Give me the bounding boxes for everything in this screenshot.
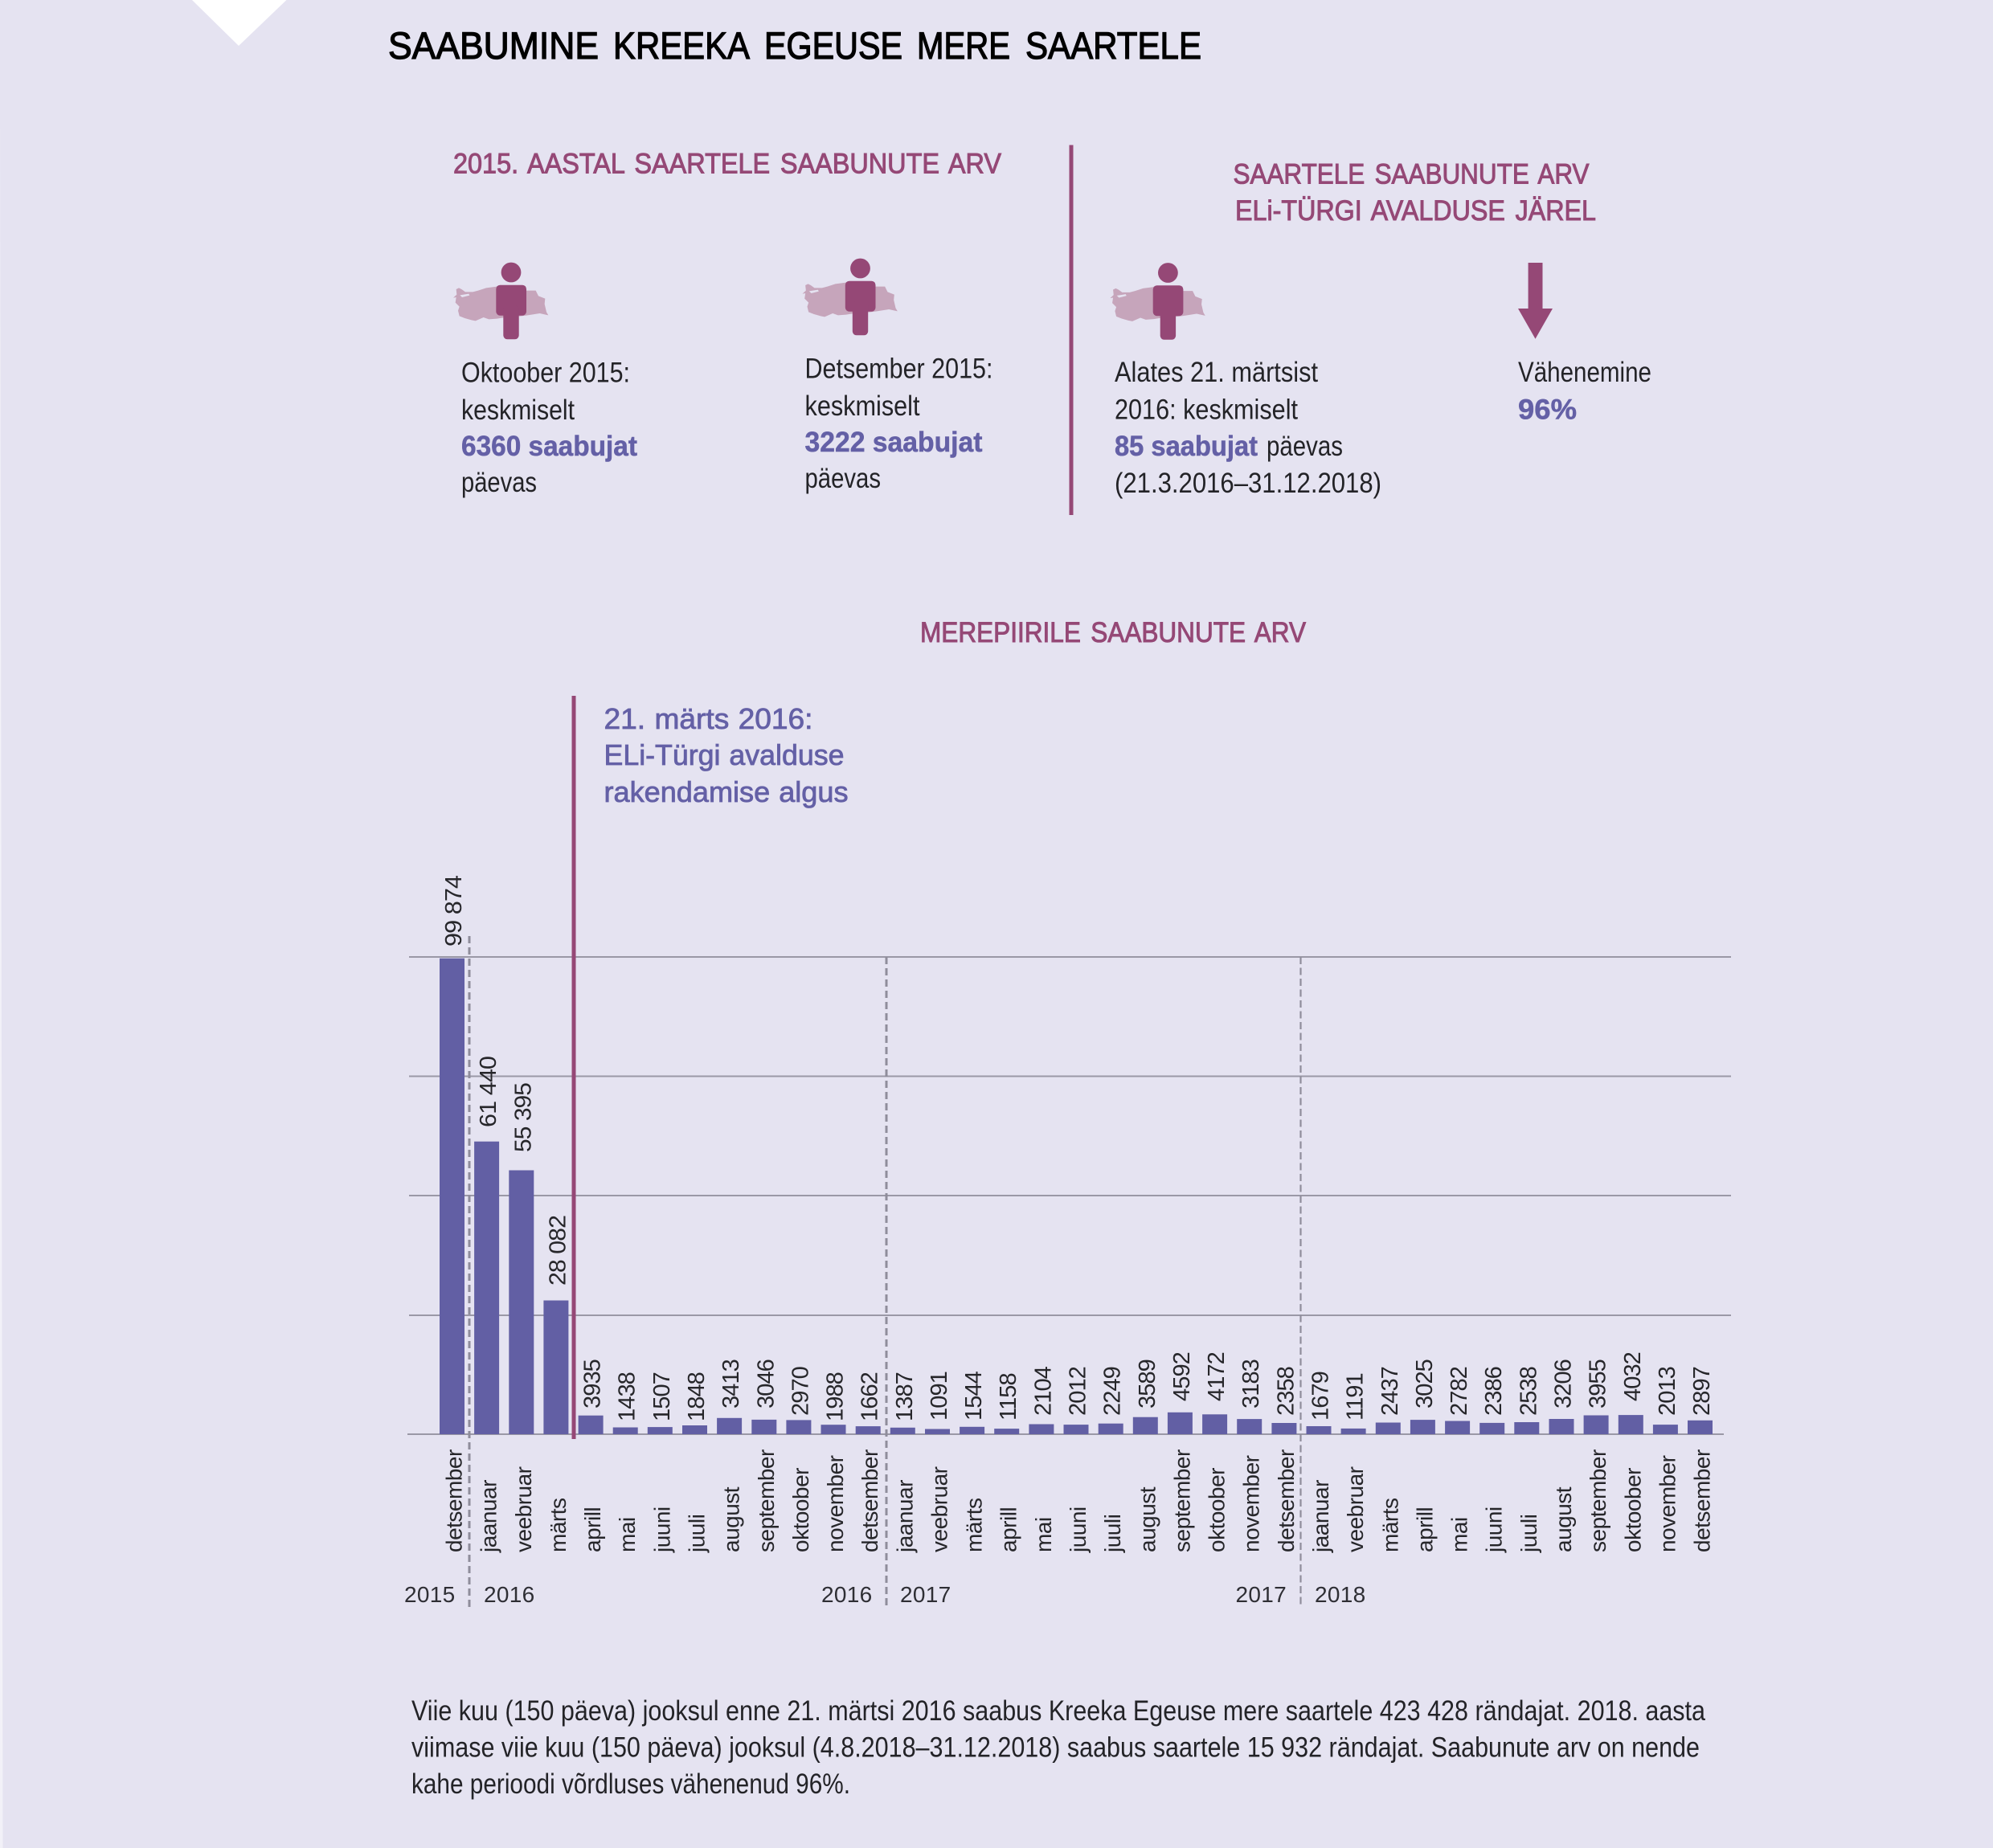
value labels: 2437 <box>1377 1367 1403 1416</box>
value labels: 2104 <box>1030 1366 1056 1416</box>
footnote paragraph: Viie kuu (150 päeva) jooksul enne 21. märtsi 2016 saabus Kreeka Egeuse mere saartele 423 428 rändajat. 2018. aasta <box>411 1695 1705 1727</box>
month labels: juuli <box>685 1515 709 1553</box>
value labels: 28 082 <box>545 1216 571 1286</box>
value labels: 2013 <box>1655 1367 1680 1416</box>
text: average since 21 March 2016: päevas <box>1267 431 1343 462</box>
title: KREEKA <box>613 24 751 67</box>
monthly bars <box>440 959 1713 1434</box>
value labels: 1191 <box>1343 1373 1369 1421</box>
chart heading: MEREPIIRILE SAABUNUTE ARV <box>920 617 1307 648</box>
divider between panels <box>1069 145 1074 515</box>
value labels: 1662 <box>857 1372 883 1421</box>
year labels: 2015 <box>404 1582 455 1607</box>
month labels: oktoober <box>788 1468 813 1552</box>
value labels: 2782 <box>1447 1367 1472 1416</box>
month labels: detsember <box>442 1449 466 1552</box>
text: December 2015 average: Detsember 2015: <box>805 354 993 384</box>
footnote paragraph: kahe perioodi võrdluses vähenenud 96%. <box>411 1768 850 1800</box>
text: December 2015 average: 3222 saabujat <box>805 427 983 458</box>
text: average since 21 March 2016: (21.3.2016–31.12.2018) <box>1115 468 1381 499</box>
text: October 2015 average: 6360 saabujat <box>461 431 637 462</box>
month labels: september <box>1586 1449 1610 1552</box>
bar chart: sea border arrivals <box>404 875 1731 1607</box>
heading: arrivals after statement <box>1233 159 1596 227</box>
value labels: 2249 <box>1100 1367 1126 1416</box>
value labels: 99 874 <box>441 875 467 946</box>
month labels: juuli <box>1100 1515 1125 1553</box>
value labels: 2012 <box>1066 1367 1091 1416</box>
text: decrease 96%: Vähenemine <box>1518 357 1651 388</box>
value labels: 1091 <box>927 1372 952 1421</box>
month labels: mai <box>1447 1517 1472 1552</box>
year labels: 2017 <box>900 1582 951 1607</box>
text: average since 21 March 2016: 85 saabujat <box>1115 431 1258 462</box>
text: December 2015 average: päevas <box>805 463 881 494</box>
value labels: 4172 <box>1204 1352 1230 1401</box>
value labels: 1438 <box>615 1372 640 1421</box>
value labels: 61 440 <box>476 1057 501 1127</box>
month labels: mai <box>1031 1517 1056 1552</box>
year labels: 2017 <box>1236 1582 1287 1607</box>
year labels <box>404 1582 1366 1607</box>
text: October 2015 average: keskmiselt <box>461 395 575 426</box>
text: December 2015 average <box>805 354 993 494</box>
month labels: juuni <box>1066 1507 1091 1553</box>
text: average since 21 March 2016: Alates 21. märtsist <box>1115 357 1318 388</box>
callout: start of EU-Turkey statement: 21. märts 2016: <box>604 702 813 735</box>
month labels: aprill <box>580 1507 605 1552</box>
value labels <box>441 875 1715 1421</box>
value labels: 4032 <box>1620 1352 1646 1401</box>
icon: person over Turkey map, October 2015 <box>453 263 548 339</box>
value labels: 2358 <box>1273 1367 1299 1416</box>
month labels: september <box>1169 1449 1194 1552</box>
text: October 2015 average: Oktoober 2015: <box>461 357 630 389</box>
month labels: juuli <box>1516 1515 1541 1553</box>
text: October 2015 average <box>461 357 637 498</box>
value labels: 3046 <box>753 1359 779 1408</box>
year labels: 2016 <box>484 1582 535 1607</box>
value labels: 4592 <box>1169 1352 1195 1401</box>
heading: arrivals after statement: SAARTELE SAABUNUTE ARV <box>1233 159 1590 190</box>
value labels: 2897 <box>1689 1367 1715 1416</box>
marker line: 21 March 2016 <box>572 696 575 1439</box>
month labels: august <box>719 1486 744 1552</box>
month labels: mai <box>615 1517 640 1552</box>
title: EGEUSE <box>764 24 902 67</box>
text: decrease 96% <box>1518 357 1651 426</box>
value labels: 1387 <box>892 1372 918 1421</box>
year separators <box>469 936 1300 1607</box>
title: SAABUMINE <box>388 24 599 67</box>
value labels: 3589 <box>1135 1359 1160 1408</box>
text: December 2015 average: keskmiselt <box>805 390 920 422</box>
value labels: 55 395 <box>510 1083 536 1152</box>
text: average since 21 March 2016: 2016: keskmiselt <box>1115 394 1298 426</box>
month labels: veebruar <box>511 1466 536 1552</box>
icon: down arrow <box>1518 263 1553 339</box>
year labels: 2018 <box>1315 1582 1366 1607</box>
month labels: november <box>1239 1455 1264 1552</box>
month labels: november <box>823 1455 848 1552</box>
month labels: veebruar <box>927 1466 951 1552</box>
value labels: 1848 <box>684 1372 710 1421</box>
month labels: märts <box>546 1498 571 1552</box>
year labels: 2016 <box>821 1582 873 1607</box>
value labels: 2386 <box>1481 1367 1507 1416</box>
value labels: 1158 <box>996 1373 1021 1421</box>
panel: 2015 arrivals <box>453 148 1002 498</box>
title: SAARTELE <box>1025 24 1201 67</box>
footnote paragraph <box>411 1695 1705 1800</box>
month labels: jaanuar <box>477 1480 501 1553</box>
value labels: 3183 <box>1238 1359 1264 1408</box>
month labels: detsember <box>857 1449 882 1552</box>
month labels: juuni <box>1482 1507 1507 1553</box>
month labels: jaanuar <box>1308 1480 1333 1553</box>
month labels: detsember <box>1274 1449 1299 1552</box>
value labels: 1988 <box>823 1372 849 1421</box>
month labels: aprill <box>996 1507 1021 1552</box>
icon: person over Turkey map, December 2015 <box>802 259 898 335</box>
value labels: 1507 <box>649 1372 675 1421</box>
month labels: november <box>1655 1455 1680 1552</box>
callout: start of EU-Turkey statement <box>604 702 849 808</box>
chart grid lines <box>407 957 1731 1434</box>
panel: arrivals after EU-Turkey statement <box>1110 159 1651 499</box>
value labels: 3955 <box>1586 1359 1611 1408</box>
icon: person over Turkey map, since March 2016 <box>1110 263 1205 340</box>
text: decrease 96%: 96% <box>1518 394 1577 426</box>
footnote paragraph: viimase viie kuu (150 päeva) jooksul (4.8.2018–31.12.2018) saabus saartele 15 932 rändajat. Saabunute arv on nende <box>411 1732 1700 1763</box>
value labels: 2970 <box>788 1367 813 1416</box>
month labels: märts <box>962 1498 987 1552</box>
month labels: detsember <box>1689 1449 1715 1552</box>
month labels: juuni <box>649 1507 674 1553</box>
heading: 2015 arrivals: 2015. AASTAL SAARTELE SAABUNUTE ARV <box>453 148 1002 180</box>
title: MERE <box>917 24 1010 67</box>
value labels: 1544 <box>961 1371 987 1421</box>
month labels: jaanuar <box>892 1480 917 1553</box>
value labels: 3413 <box>718 1359 744 1408</box>
callout: start of EU-Turkey statement: ELi-Türgi avalduse <box>604 738 844 771</box>
decorative notch: white triangle <box>192 0 286 46</box>
month labels: august <box>1551 1486 1576 1552</box>
month labels: veebruar <box>1343 1466 1368 1552</box>
text: average since 21 March 2016 <box>1115 357 1381 499</box>
value labels: 2538 <box>1516 1367 1541 1416</box>
value labels: 1679 <box>1308 1372 1334 1421</box>
month labels: oktoober <box>1620 1468 1645 1552</box>
month labels: august <box>1135 1486 1160 1552</box>
value labels: 3206 <box>1551 1359 1577 1408</box>
callout: start of EU-Turkey statement: rakendamise algus <box>604 775 849 808</box>
title <box>388 24 1201 67</box>
month labels: aprill <box>1412 1507 1437 1552</box>
value labels: 3025 <box>1412 1359 1438 1408</box>
month labels <box>442 1449 1715 1553</box>
value labels: 3935 <box>580 1359 606 1408</box>
month labels: september <box>754 1449 779 1552</box>
month labels: märts <box>1377 1498 1402 1552</box>
month labels: oktoober <box>1205 1468 1230 1552</box>
text: October 2015 average: päevas <box>461 467 537 498</box>
heading: arrivals after statement: ELi-TÜRGI AVALDUSE JÄREL <box>1235 195 1596 227</box>
